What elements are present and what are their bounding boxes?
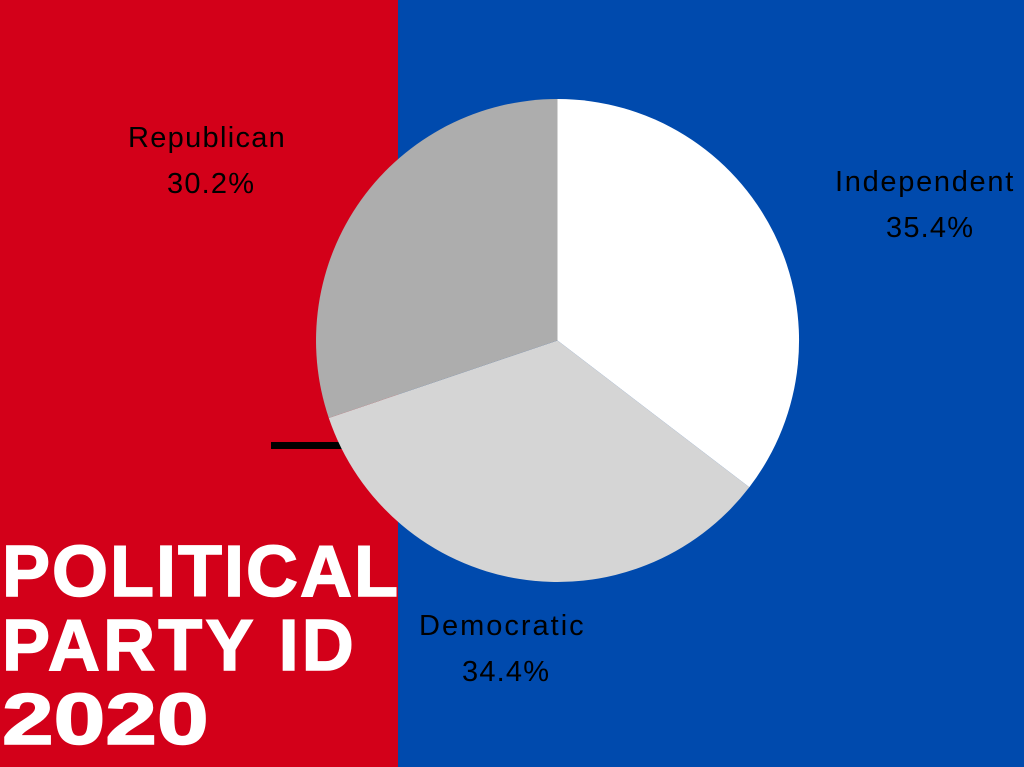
slice: Republican (316, 99, 558, 418)
slice: Independent (558, 99, 799, 487)
title (2, 532, 400, 760)
label: Democratic (419, 610, 586, 688)
panel: red background (0, 0, 398, 767)
title: POLITICAL (2, 532, 400, 612)
label: Independent: Independent (835, 166, 1015, 198)
label: Republican: 30.2% (167, 168, 255, 200)
label: Republican (128, 122, 286, 200)
accent line (271, 442, 351, 449)
label: Democratic: Democratic (419, 610, 586, 642)
label: Republican: Republican (128, 122, 286, 154)
title: 2020 (2, 680, 209, 760)
title: PARTY ID (2, 606, 357, 686)
slice: Democratic (329, 340, 749, 582)
label: Independent: 35.4% (886, 212, 974, 244)
label: Democratic: 34.4% (462, 656, 550, 688)
label: Independent (835, 166, 1015, 244)
